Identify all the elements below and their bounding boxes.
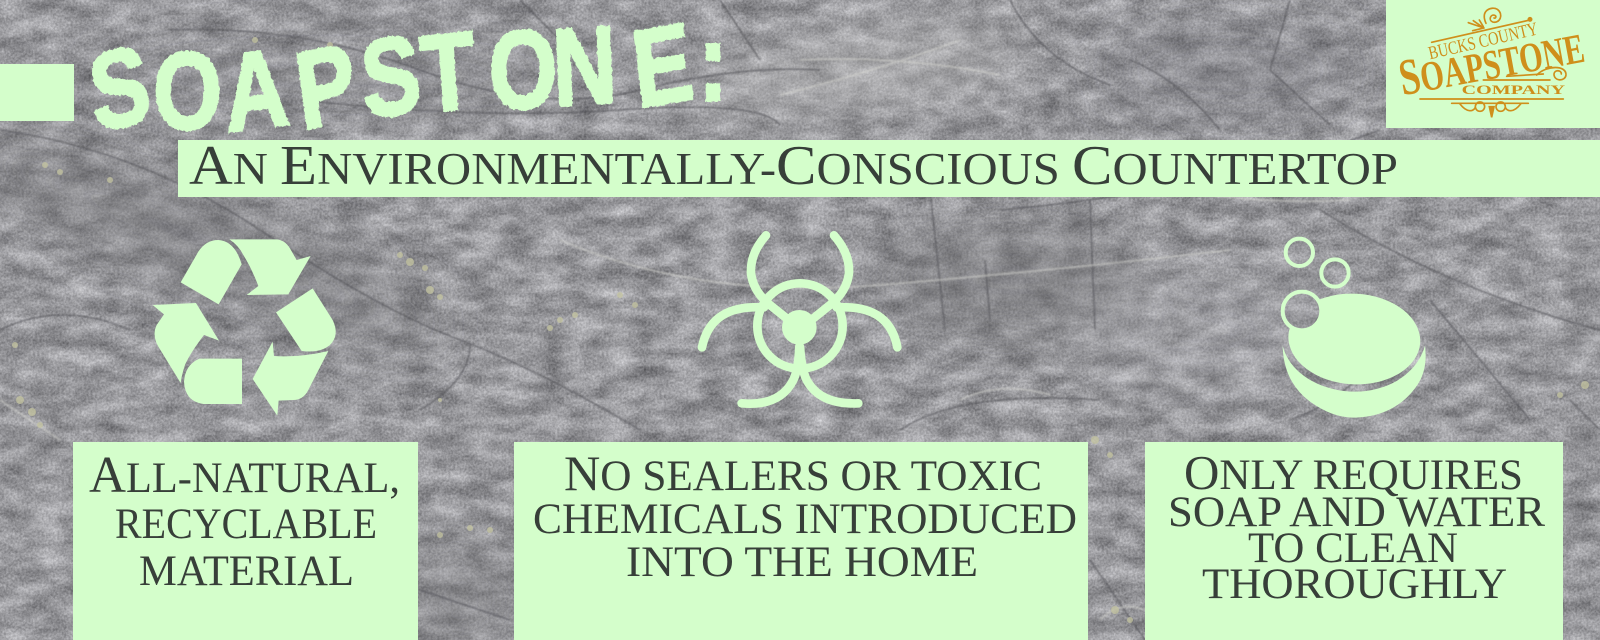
logo wordmark: COMPANY bbox=[1462, 83, 1565, 97]
panel: no sealers bbox=[514, 442, 1088, 640]
text: only requires: ONLY REQUIRES bbox=[1184, 445, 1523, 500]
text: only requires bbox=[1168, 445, 1545, 608]
title: SOAPSTONE: bbox=[82, 0, 728, 156]
text: no sealers: CHEMICALS INTRODUCED bbox=[533, 496, 1077, 543]
text: all-natural: ALL-NATURAL, bbox=[89, 447, 400, 504]
subtitle band bbox=[178, 135, 1600, 197]
text: all-natural: MATERIAL bbox=[139, 548, 354, 595]
subtitle text: AN ENVIRONMENTALLY- CONSCIOUS COUNTERTOP bbox=[189, 135, 1398, 197]
panel: only requires bbox=[1145, 442, 1563, 640]
icon: recycling symbol bbox=[153, 239, 336, 416]
logo ornaments bbox=[1420, 8, 1566, 117]
text: no sealers: NO SEALERS OR TOXIC bbox=[564, 445, 1042, 501]
icon: biohazard symbol bbox=[702, 235, 897, 404]
icon: soap bar with bubbles bbox=[1283, 239, 1426, 418]
panel: all-natural bbox=[73, 442, 418, 640]
text: only requires: SOAP AND WATER bbox=[1168, 489, 1545, 536]
accent square bbox=[0, 64, 74, 121]
logo wordmark: BUCKS COUNTY bbox=[1426, 19, 1540, 64]
text: only requires: THOROUGHLY bbox=[1202, 561, 1507, 608]
text: all-natural: RECYCLABLE bbox=[115, 501, 377, 548]
text: only requires: TO CLEAN bbox=[1248, 525, 1458, 572]
text: all-natural bbox=[89, 447, 400, 595]
text: no sealers: INTO THE HOME bbox=[626, 539, 978, 586]
logo panel bbox=[1386, 0, 1600, 128]
text: no sealers bbox=[533, 445, 1077, 586]
